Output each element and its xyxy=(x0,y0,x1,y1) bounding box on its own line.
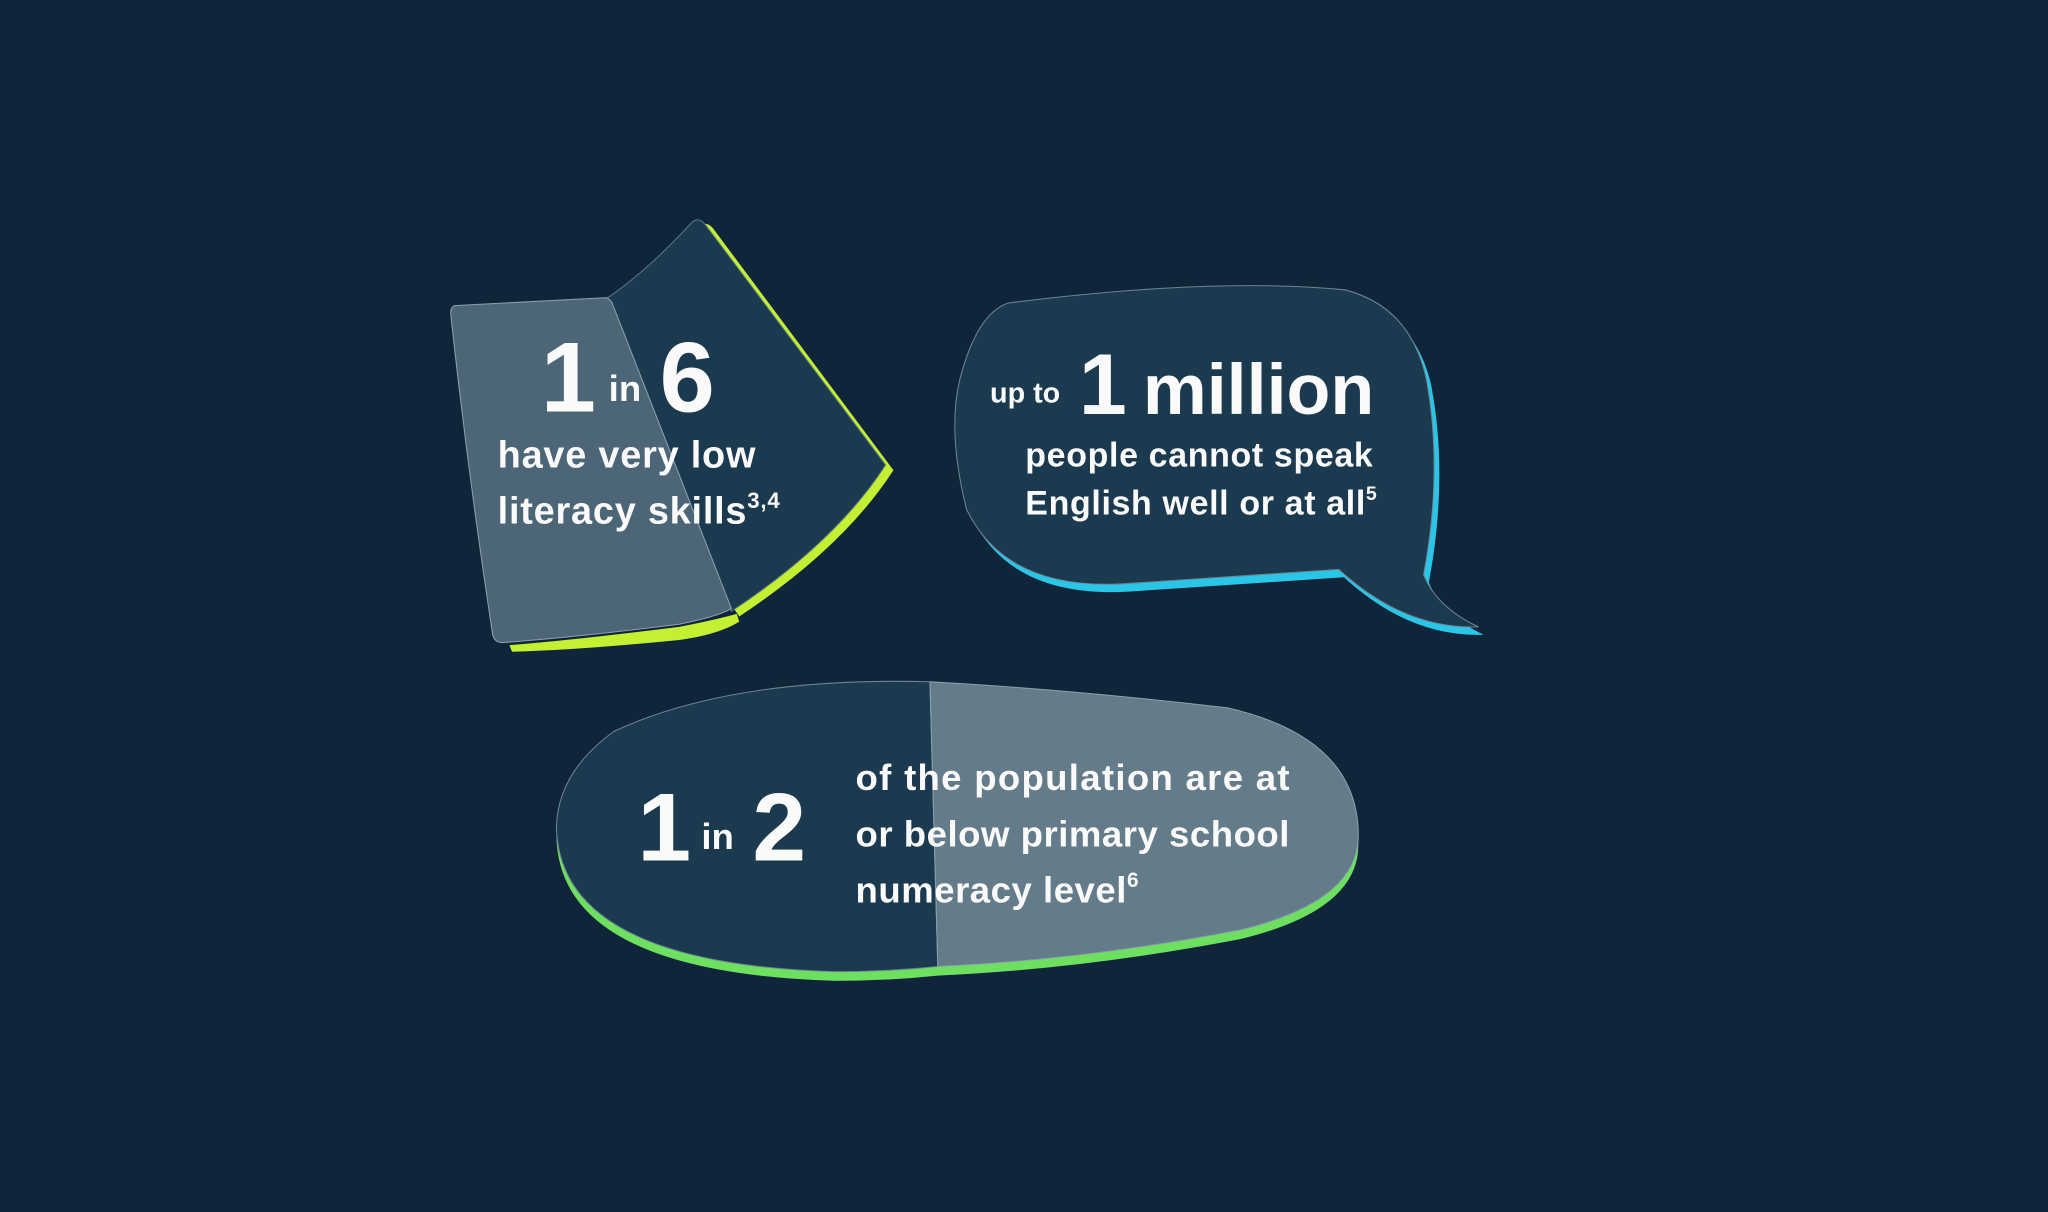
caption: literacy: 3,4 xyxy=(747,488,780,513)
book left page xyxy=(451,298,731,643)
caption: numeracy: numeracy level xyxy=(856,869,1127,910)
stat text: 1 in 2: 1 xyxy=(637,775,691,882)
caption: literacy: literacy skills xyxy=(498,491,747,533)
caption: numeracy xyxy=(856,757,1291,910)
panel: pill numeracy xyxy=(556,681,1358,981)
stat text: up to 1 million: million xyxy=(1143,350,1374,430)
caption: literacy: have very low xyxy=(498,435,756,477)
stat text: up to 1 million xyxy=(990,337,1374,433)
stat text: 1 in 2 xyxy=(637,775,806,882)
caption: numeracy: of the population are at xyxy=(856,757,1291,798)
stat text: up to 1 million: 1 xyxy=(1079,337,1127,433)
caption: English: 5 xyxy=(1366,483,1377,505)
bubble blue edge xyxy=(960,293,1484,635)
book green edge xyxy=(509,224,893,652)
pill left half xyxy=(556,681,938,972)
stat text: 1 in 2: 2 xyxy=(752,775,806,882)
stat text: up to 1 million: up to xyxy=(990,377,1060,409)
caption: numeracy: 6 xyxy=(1127,869,1139,892)
stat text: 1 in 6 xyxy=(541,322,715,433)
stat text: 1 in 6: 6 xyxy=(660,322,715,433)
caption: numeracy: or below primary school xyxy=(856,813,1290,854)
caption: English xyxy=(1025,436,1377,523)
caption: literacy xyxy=(498,435,780,533)
stat text: 1 in 2: in xyxy=(701,816,734,857)
caption: English: English well or at all xyxy=(1025,485,1366,523)
pill green edge xyxy=(556,690,1358,981)
book right page xyxy=(607,220,886,611)
caption: English: people cannot speak xyxy=(1025,436,1373,474)
bubble body xyxy=(955,286,1478,627)
stat text: 1 in 6: 1 xyxy=(541,322,596,433)
pill right half xyxy=(930,682,1358,966)
stat text: 1 in 6: in xyxy=(609,368,641,409)
panel: speech bubble English xyxy=(955,286,1484,635)
panel: book literacy xyxy=(451,220,893,652)
